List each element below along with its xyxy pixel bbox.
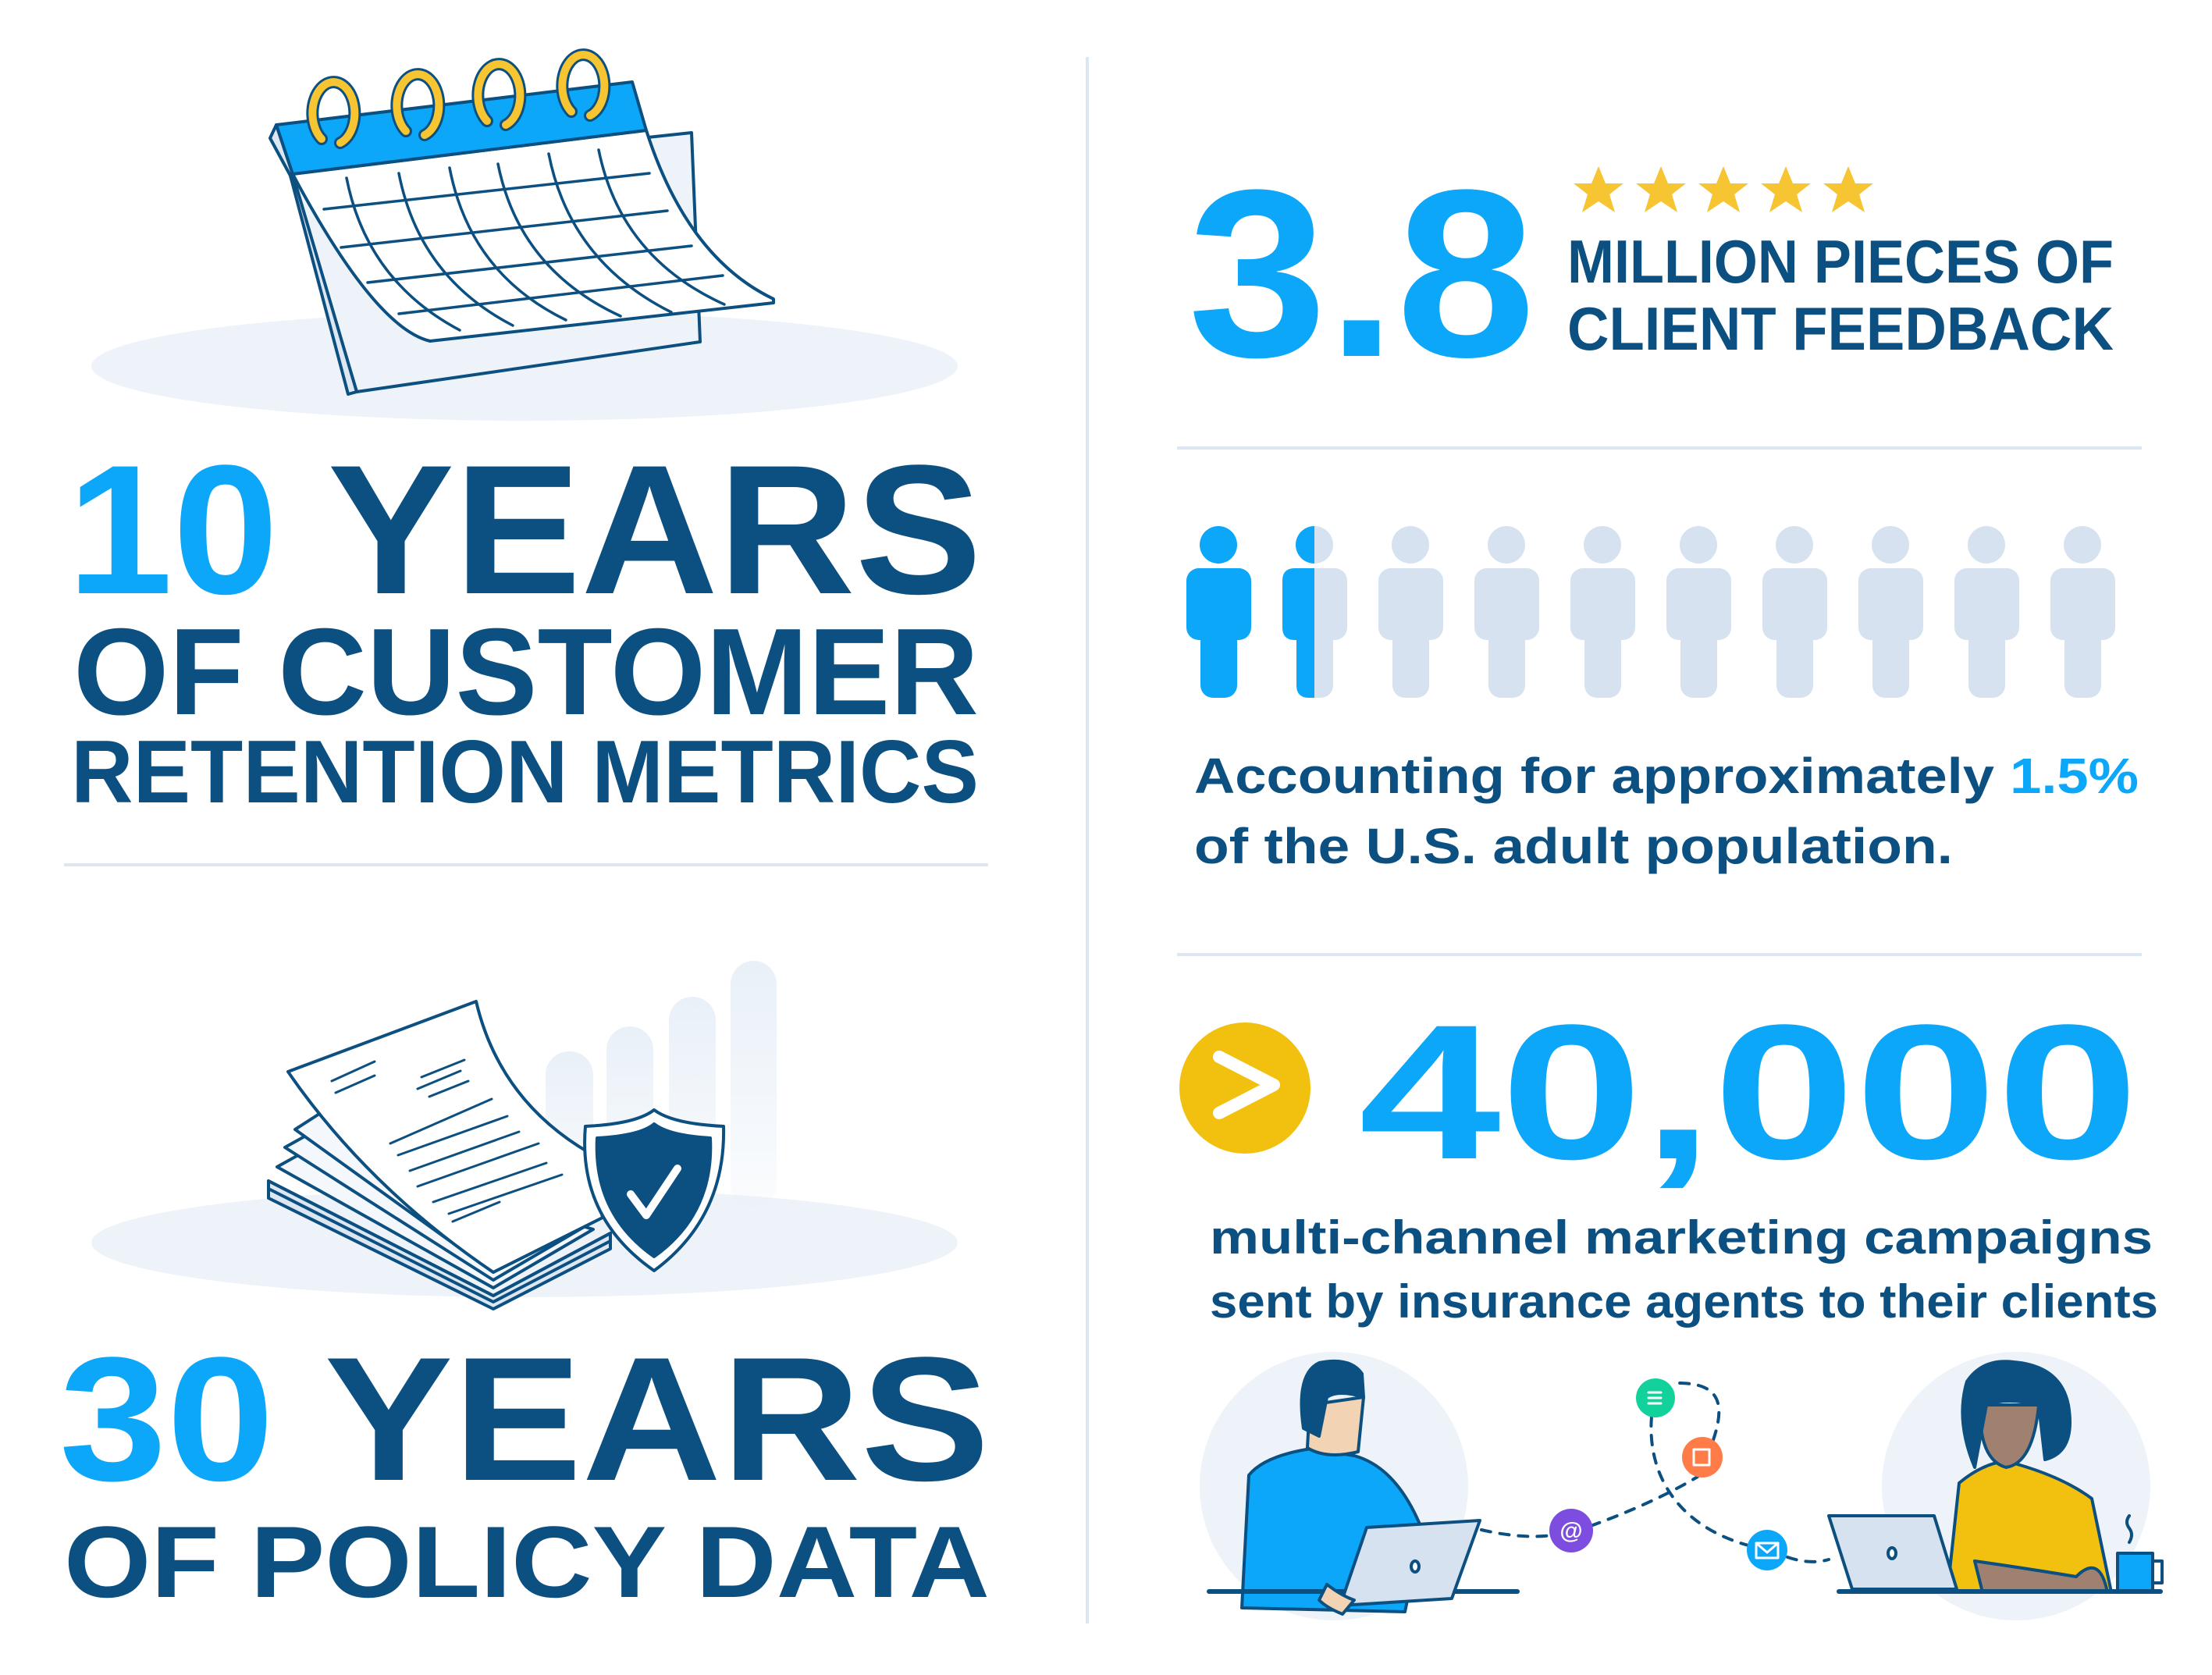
stat: 3.8 million: 3.8: [1188, 140, 1535, 407]
icon: calendar: [91, 55, 958, 421]
vertical divider: [1086, 57, 1089, 1623]
heading: 30 years: OF POLICY DATA: [64, 1505, 990, 1619]
stat: 3.8 million: MILLION PIECES OF: [1567, 227, 2114, 296]
stat: 3.8 million: [1188, 140, 2114, 407]
stat: 40,000 campaigns: [1179, 985, 2158, 1328]
man: [1209, 1361, 1517, 1614]
stat: 3.8 million: CLIENT FEEDBACK: [1567, 294, 2114, 363]
text: population share: Accounting for approximately 1.5%: [1194, 748, 2139, 804]
heading: 10 years: 10 YEARS: [67, 427, 982, 633]
icons: channel bubbles: [1549, 1378, 1787, 1570]
dashed message path: [1481, 1383, 1829, 1562]
heading: 10 years: RETENTION METRICS: [71, 723, 979, 822]
illustration: agent and client communicating: [1200, 1352, 2162, 1620]
icons: channel bubbles: @: [1559, 1518, 1583, 1544]
heading: 10 years: [67, 427, 982, 822]
heading: 30 years: [59, 1320, 990, 1619]
icon: five stars: [1574, 166, 1873, 212]
stat: 40,000 campaigns: multi-channel marketing campaigns: [1210, 1211, 2153, 1264]
icon: greater-than badge: [1179, 1022, 1310, 1154]
icon: policy documents with shield: [91, 961, 958, 1309]
stat: 40,000 campaigns: sent by insurance agents to their clients: [1210, 1275, 2158, 1328]
heading: 10 years: OF CUSTOMER: [73, 603, 979, 741]
heading: 30 years: 30 YEARS: [59, 1320, 990, 1517]
woman: [1829, 1361, 2162, 1592]
stat: 40,000 campaigns: 40,000: [1359, 985, 2139, 1200]
text: population share: of the U.S. adult population.: [1194, 818, 1953, 874]
text: population share: [1194, 748, 2139, 874]
chart: people pictogram: [1186, 526, 2115, 698]
